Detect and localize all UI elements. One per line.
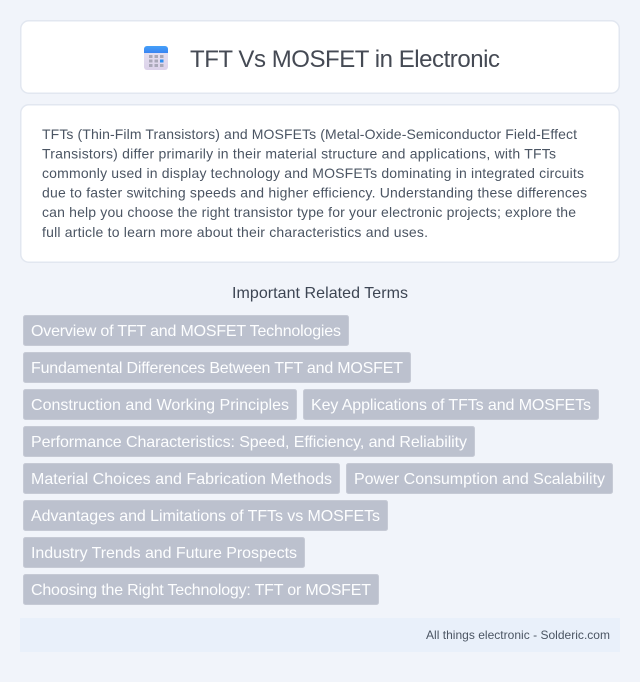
- chip: industry trends: [24, 538, 304, 568]
- chip: performance: Performance Characteristics: Speed, Efficiency, and Reliability: [31, 434, 467, 451]
- chip: choosing: Choosing the Right Technology: TFT or MOSFET: [31, 582, 371, 599]
- chip: choosing: [24, 574, 378, 604]
- chip: advantages: [24, 500, 388, 530]
- panel: title card: [21, 21, 619, 93]
- chip: power: [346, 464, 612, 494]
- text block: summary: can help you choose the right transistor type for your electronic projects; explore the: [42, 204, 576, 220]
- chip: key applications: [304, 390, 598, 420]
- footer: All things electronic - Solderic.com: [426, 628, 610, 642]
- panel: related term chips: [24, 316, 612, 604]
- chip: overview: Overview of TFT and MOSFET Technologies: [31, 323, 341, 340]
- chip: materials: Material Choices and Fabrication Methods: [31, 471, 332, 488]
- heading: related terms: Important Related Terms: [232, 285, 408, 302]
- chip: materials: [24, 464, 340, 494]
- chip: advantages: Advantages and Limitations of TFTs vs MOSFETs: [31, 508, 380, 525]
- chip: overview: [24, 316, 348, 346]
- title: TFT Vs MOSFET in Electronic: [190, 46, 500, 73]
- chip: key applications: Key Applications of TFTs and MOSFETs: [311, 397, 591, 414]
- chip: power: Power Consumption and Scalability: [354, 471, 605, 488]
- footer: [20, 618, 620, 652]
- text block: summary: due to faster switching speeds and higher efficiency. Understanding these differences: [42, 184, 587, 200]
- text block: summary: commonly used in display technology and MOSFETs dominating in integrated circuits: [42, 165, 584, 181]
- text block: summary: full article to learn more about their characteristics and uses.: [42, 224, 428, 240]
- chip: performance: [24, 426, 474, 456]
- chip: fundamental differences: [24, 352, 410, 382]
- chip: industry trends: Industry Trends and Future Prospects: [31, 545, 297, 562]
- panel: summary paragraph: [21, 105, 619, 262]
- text block: summary: Transistors) differ primarily in their material structure and applications, with TFTs: [42, 146, 556, 162]
- text block: summary: TFTs (Thin-Film Transistors) and MOSFETs (Metal-Oxide-Semiconductor Field-Effect: [42, 126, 577, 142]
- chip: fundamental differences: Fundamental Differences Between TFT and MOSFET: [31, 360, 403, 377]
- chip: construction: [24, 390, 296, 420]
- chip: construction: Construction and Working Principles: [31, 397, 289, 414]
- text block: summary: [42, 126, 587, 240]
- icon: calendar grid: [144, 46, 168, 70]
